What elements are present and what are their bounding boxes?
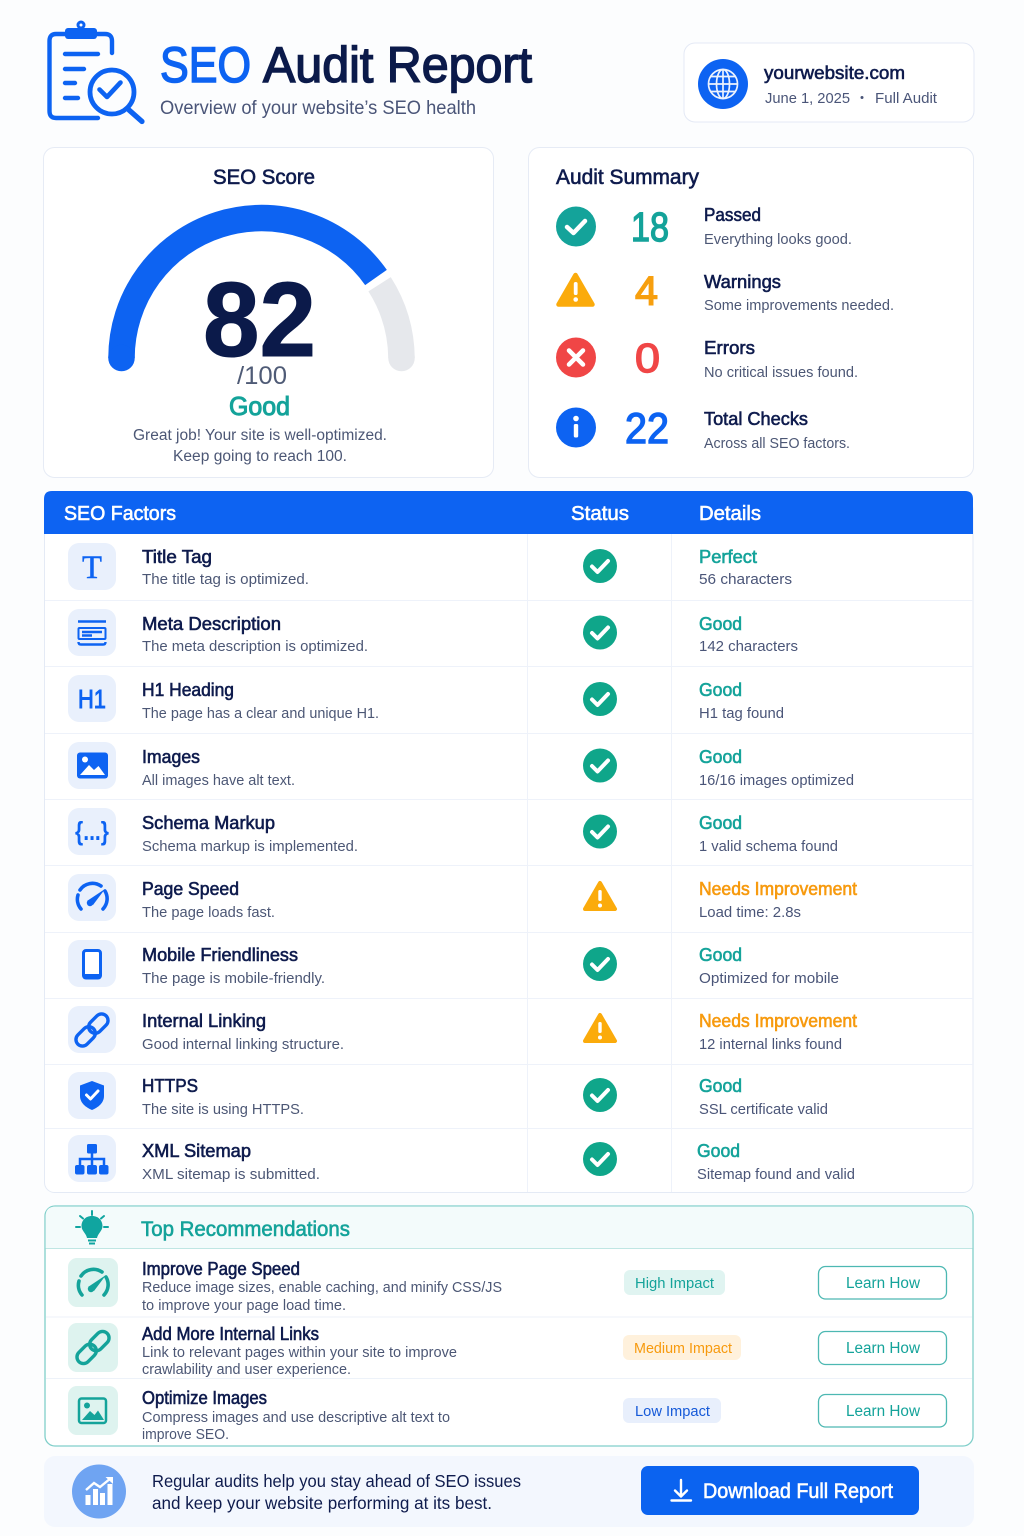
audit date and type xyxy=(765,90,938,107)
button: download full report xyxy=(641,1466,919,1515)
footer message xyxy=(152,1471,521,1513)
row: Internal Linking: Good internal linking structure. xyxy=(142,1036,344,1053)
row: Meta Description: 142 characters xyxy=(699,638,798,655)
panel: SEO score xyxy=(44,148,494,478)
summary: errors: 0 xyxy=(635,335,660,381)
row: Title Tag: T xyxy=(82,550,102,586)
row: H1 Heading: The page has a clear and unique H1. xyxy=(142,705,379,722)
summary: passed: Passed xyxy=(704,204,761,225)
summary: errors: No critical issues found. xyxy=(704,364,858,381)
score description: Keep going to reach 100. xyxy=(173,448,347,465)
gauge xyxy=(108,218,415,371)
recommendation: add more internal links: Link to relevant pages within your site to improve xyxy=(142,1344,457,1361)
row: XML Sitemap: Sitemap found and valid xyxy=(697,1166,855,1183)
summary: total checks: 22 xyxy=(625,405,669,453)
summary: warnings: 4 xyxy=(635,268,658,314)
recommendation: optimize images: Low Impact xyxy=(635,1403,711,1420)
row: Schema Markup xyxy=(68,808,838,855)
table header: Details xyxy=(699,502,761,525)
panel: footer call to action xyxy=(44,1456,974,1527)
summary: warnings: Warnings xyxy=(704,271,781,292)
row: Title Tag xyxy=(68,543,792,590)
row: Meta Description: The meta description is optimized. xyxy=(142,638,368,655)
heading: SEO Score: SEO Score xyxy=(213,166,315,189)
summary: total checks xyxy=(556,405,850,453)
row: Internal Linking xyxy=(68,1006,857,1053)
summary: errors xyxy=(556,335,858,381)
score description xyxy=(133,427,387,465)
summary: total checks: Total Checks xyxy=(704,408,808,429)
panel: site info xyxy=(684,43,974,122)
row: Mobile Friendliness: Mobile Friendliness xyxy=(142,944,298,965)
table header: SEO Factors xyxy=(64,502,176,525)
recommendation: add more internal links xyxy=(68,1323,946,1378)
row: Internal Linking: 12 internal links found xyxy=(699,1036,842,1053)
recommendation: optimize images xyxy=(68,1386,946,1443)
row: Mobile Friendliness: Optimized for mobile xyxy=(699,970,839,987)
summary: passed: Everything looks good. xyxy=(704,231,852,248)
row: Images: All images have alt text. xyxy=(142,772,295,789)
summary: warnings: Some improvements needed. xyxy=(704,297,894,314)
subtitle: Overview of your website’s SEO health xyxy=(160,97,476,119)
site name: yourwebsite.com xyxy=(764,62,905,83)
button: download full report: Download Full Report xyxy=(703,1480,893,1503)
row: Schema Markup: {...} xyxy=(75,816,109,846)
recommendation: optimize images: Optimize Images xyxy=(142,1388,267,1408)
row: Schema Markup: Schema markup is implemented. xyxy=(142,838,358,855)
row: Schema Markup: Good xyxy=(699,813,742,833)
row: Mobile Friendliness: Good xyxy=(699,945,742,965)
row: HTTPS: Good xyxy=(699,1076,742,1096)
row: Internal Linking: Needs Improvement xyxy=(699,1011,857,1031)
row: Meta Description xyxy=(68,609,798,656)
recommendation: add more internal links: Add More Internal Links xyxy=(142,1324,319,1344)
title: Audit Report xyxy=(263,37,532,93)
footer message: Regular audits help you stay ahead of SEO issues xyxy=(152,1471,521,1491)
panel: audit summary xyxy=(528,148,974,478)
row: Meta Description: Meta Description xyxy=(142,613,281,634)
row: Page Speed: Load time: 2.8s xyxy=(699,904,801,921)
row: Meta Description: Good xyxy=(699,614,742,634)
summary: total checks: Across all SEO factors. xyxy=(704,435,850,452)
recommendation: add more internal links: crawlability and user experience. xyxy=(142,1361,351,1378)
icon: growth chart xyxy=(72,1464,126,1518)
icon: clipboard with magnifier xyxy=(50,20,142,122)
row: XML Sitemap xyxy=(68,1135,855,1183)
row: Images: Good xyxy=(699,747,742,767)
header xyxy=(44,20,976,124)
row: Schema Markup: 1 valid schema found xyxy=(699,838,838,855)
row: Page Speed: Needs Improvement xyxy=(699,879,857,899)
row: Title Tag: 56 characters xyxy=(699,571,792,588)
row: XML Sitemap: XML Sitemap xyxy=(142,1140,251,1161)
row: HTTPS xyxy=(68,1072,828,1119)
row: Title Tag: Title Tag xyxy=(142,546,212,567)
row: Internal Linking: Internal Linking xyxy=(142,1010,266,1031)
row: XML Sitemap: XML sitemap is submitted. xyxy=(142,1166,320,1183)
summary: passed xyxy=(556,204,852,250)
icon: light bulb xyxy=(76,1211,108,1244)
row: H1 Heading: H1 Heading xyxy=(142,679,234,700)
row: Page Speed: Page Speed xyxy=(142,878,239,899)
icon: globe xyxy=(698,59,748,109)
row: HTTPS: The site is using HTTPS. xyxy=(142,1101,304,1118)
score value: 82 xyxy=(203,261,316,379)
table header xyxy=(44,491,973,534)
row: Page Speed xyxy=(68,874,857,921)
row: Schema Markup: Schema Markup xyxy=(142,812,275,833)
row: Images xyxy=(68,742,854,789)
heading: Audit Summary: Audit Summary xyxy=(556,166,699,189)
recommendation: optimize images: Learn How xyxy=(846,1403,921,1420)
panel: top recommendations xyxy=(45,1206,973,1446)
summary: warnings xyxy=(558,268,894,314)
recommendation: improve page speed: Learn How xyxy=(846,1275,921,1292)
rating: Good xyxy=(229,391,290,421)
audit date and type: June 1, 2025 xyxy=(765,90,850,107)
recommendation: improve page speed xyxy=(68,1258,946,1314)
recommendation: improve page speed: Improve Page Speed xyxy=(142,1259,300,1279)
heading: Top Recommendations: Top Recommendations xyxy=(141,1218,350,1241)
score description: Great job! Your site is well-optimized. xyxy=(133,427,387,444)
row: HTTPS: HTTPS xyxy=(142,1075,198,1096)
row: Images: 16/16 images optimized xyxy=(699,772,854,789)
row: XML Sitemap: Good xyxy=(697,1141,740,1161)
score maximum: /100 xyxy=(237,362,287,390)
row: H1 Heading: Good xyxy=(699,680,742,700)
row: Mobile Friendliness xyxy=(68,940,839,987)
summary: passed: 18 xyxy=(631,204,669,250)
recommendation: optimize images: Compress images and use descriptive alt text to xyxy=(142,1409,450,1426)
row: Title Tag: Perfect xyxy=(699,547,757,567)
row: HTTPS: SSL certificate valid xyxy=(699,1101,828,1118)
recommendation: improve page speed: High Impact xyxy=(635,1275,715,1292)
row: Title Tag: The title tag is optimized. xyxy=(142,571,309,588)
panel: SEO factors table xyxy=(44,491,973,1192)
footer message: and keep your website performing at its best. xyxy=(152,1493,492,1513)
audit date and type: Full Audit xyxy=(875,90,938,107)
row: Images: Images xyxy=(142,746,200,767)
row: Mobile Friendliness: The page is mobile-friendly. xyxy=(142,970,325,987)
title: SEO xyxy=(160,37,251,93)
row: H1 Heading xyxy=(68,675,784,722)
recommendation: optimize images: improve SEO. xyxy=(142,1426,229,1443)
row: H1 Heading: H1 xyxy=(78,684,106,714)
recommendation: improve page speed: Reduce image sizes, enable caching, and minify CSS/JS xyxy=(142,1279,502,1296)
row: H1 Heading: H1 tag found xyxy=(699,705,784,722)
recommendation: add more internal links: Learn How xyxy=(846,1340,921,1357)
recommendation: add more internal links: Medium Impact xyxy=(634,1340,733,1357)
table header: Status xyxy=(571,502,629,525)
recommendation: improve page speed: to improve your page load time. xyxy=(142,1297,346,1314)
summary: errors: Errors xyxy=(704,337,755,358)
row: Page Speed: The page loads fast. xyxy=(142,904,275,921)
